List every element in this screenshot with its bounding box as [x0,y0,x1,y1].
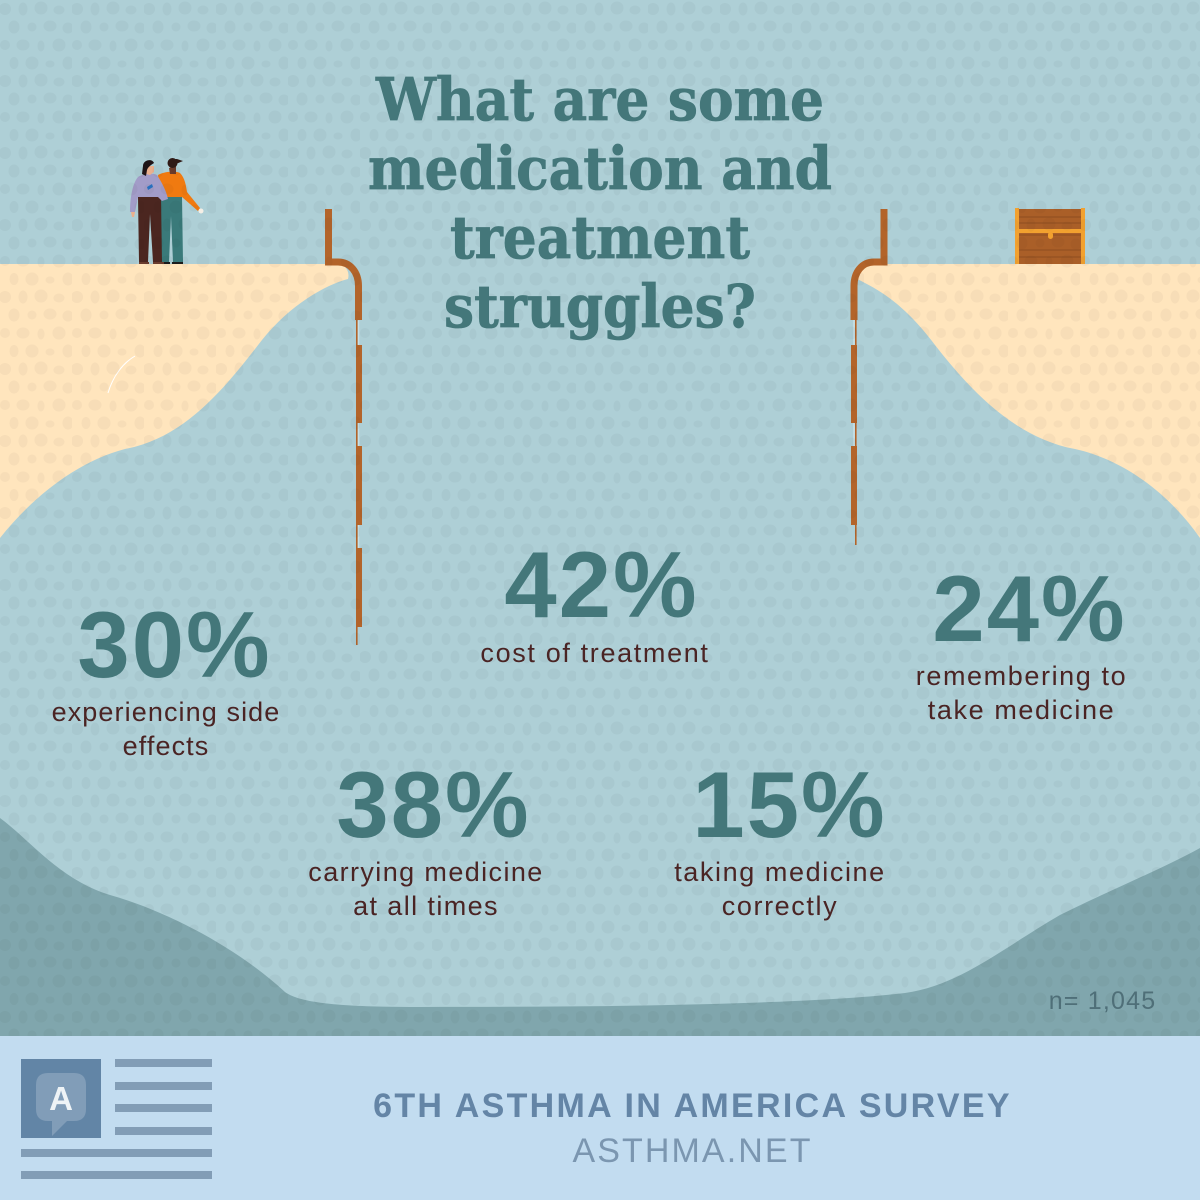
stat: 30% experiencing side effects [52,592,280,761]
stat: 38% carrying medicine at all times: carrying medicine [308,857,544,887]
title: struggles? [444,272,756,341]
stat: 42% cost of treatment: cost of treatment [480,638,710,668]
woman [130,160,168,264]
footer website: ASTHMA.NET [572,1132,813,1170]
sample size: n= 1,045 [1049,987,1156,1015]
stat: 42% cost of treatment [480,532,710,668]
logo: document with speech bubble: A [49,1080,73,1117]
stat: 24% remembering to take medicine: remembering to [916,661,1127,691]
footer heading: 6TH ASTHMA IN AMERICA SURVEY [373,1087,1012,1125]
stat: 30% experiencing side effects: experiencing side [52,697,280,727]
title: What are some [376,65,824,134]
man [158,158,204,264]
stat: 15% taking medicine correctly: 15% [692,752,887,857]
stat: 38% carrying medicine at all times: at all times [353,891,499,921]
stat: 15% taking medicine correctly [674,752,887,921]
title [368,65,832,341]
title: medication and [368,134,832,203]
stat: 24% remembering to take medicine: 24% [932,556,1127,661]
stat: 24% remembering to take medicine: take medicine [928,695,1115,725]
footer band [0,1036,1200,1200]
stat: 15% taking medicine correctly: correctly [722,891,838,921]
stat: 15% taking medicine correctly: taking medicine [674,857,886,887]
stat: 38% carrying medicine at all times: 38% [336,752,531,857]
stat: 38% carrying medicine at all times [308,752,544,921]
logo: document with speech bubble [21,1059,212,1179]
stat: 30% experiencing side effects: effects [123,731,209,761]
title: treatment [450,203,750,272]
stat: 24% remembering to take medicine [916,556,1127,725]
stat: 42% cost of treatment: 42% [504,532,699,637]
stat: 30% experiencing side effects: 30% [77,592,272,697]
